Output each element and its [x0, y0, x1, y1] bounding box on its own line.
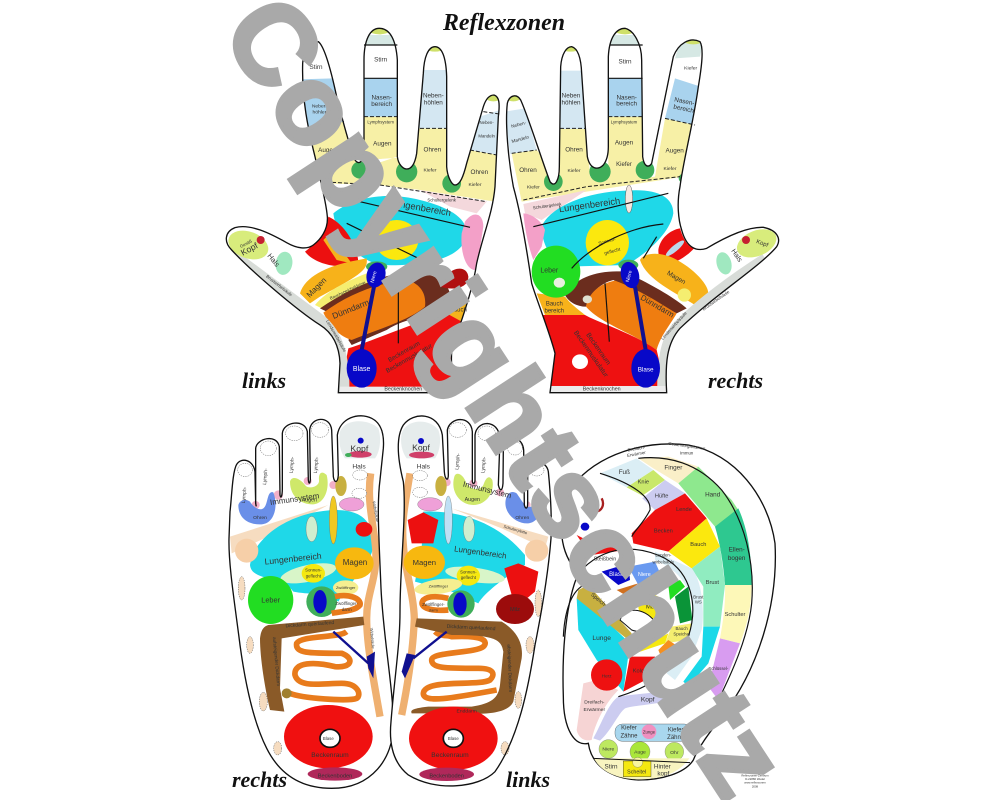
labels: geflecht	[461, 575, 477, 580]
labels: Brustwirbelsäule	[701, 289, 731, 312]
labels: Lenden-	[655, 553, 672, 558]
helix inner curves	[563, 458, 752, 700]
labels: höhlen	[313, 109, 328, 115]
shoulder band	[230, 505, 328, 553]
labels	[511, 59, 769, 393]
outline	[229, 416, 393, 788]
copyright note: 2008	[752, 784, 759, 788]
labels: Augen	[666, 148, 684, 155]
stomach	[640, 254, 708, 305]
lung area	[542, 190, 673, 267]
labels: Dreifach-	[627, 444, 646, 453]
thumb zones	[736, 229, 776, 258]
eyes U	[290, 473, 328, 504]
labels: Hüfte	[655, 494, 668, 500]
helix ring segments	[593, 457, 752, 741]
small intestine	[323, 280, 425, 340]
labels: Hals	[729, 248, 743, 264]
toe pink	[252, 477, 337, 509]
labels: Niere	[370, 270, 379, 284]
labels: Dünndarm	[433, 688, 460, 694]
labels: Bauch	[690, 542, 706, 548]
left hand zones	[224, 27, 500, 393]
labels: Magen	[646, 604, 664, 610]
labels: Blase	[609, 572, 625, 578]
labels: Leber	[540, 268, 559, 275]
thumb web red	[658, 228, 694, 264]
labels: Schultergelenk	[427, 198, 457, 203]
labels: Neben-	[480, 120, 494, 125]
labels: Beckenmuskulatur	[385, 343, 434, 375]
labels: Blase	[448, 736, 459, 741]
labels: Beckenraum	[431, 752, 469, 759]
colon	[565, 271, 687, 313]
ear silhouette	[562, 444, 775, 780]
labels: Erwärmer	[584, 707, 605, 713]
right foot silhouette	[229, 416, 393, 788]
black leader lines	[347, 45, 470, 343]
labels: Fuß	[619, 469, 630, 476]
ear lobe zones	[588, 724, 695, 782]
labels: Mandeln	[478, 133, 496, 138]
labels: Beckenboden	[429, 773, 464, 779]
labels: Stirn	[604, 764, 618, 771]
labels: Leber	[261, 595, 281, 604]
labels: Beckenraum	[387, 340, 421, 364]
label rechts hand: rechts	[708, 368, 763, 393]
labels: bogen	[728, 555, 746, 562]
inner zones	[577, 497, 692, 740]
labels: Milz	[510, 607, 520, 613]
labels: Augen	[302, 498, 317, 504]
labels: Blase	[353, 366, 371, 373]
labels: Kiefer	[527, 184, 540, 190]
labels: Schulterplatte	[503, 524, 529, 536]
labels: Nasen-	[616, 94, 637, 101]
labels: Hals	[265, 252, 282, 269]
labels: absteigender Dickdarm	[506, 644, 513, 692]
labels: Neben-	[423, 93, 444, 100]
labels: Scheitel	[627, 769, 646, 775]
labels: Blase	[638, 366, 654, 373]
labels: Neben	[562, 93, 581, 100]
labels: Magen	[666, 270, 687, 286]
spine band	[402, 473, 414, 715]
labels: bereich	[616, 100, 638, 107]
foot side labels: rechts	[232, 767, 287, 792]
labels: geflecht	[604, 247, 621, 256]
labels: Brust	[706, 580, 719, 586]
labels: Lymph-	[289, 456, 296, 473]
labels: Sonnen-	[305, 568, 322, 573]
labels: Beckenboden	[318, 773, 352, 779]
labels: Magen	[343, 558, 367, 567]
dashed circles	[413, 423, 544, 755]
labels: Magen	[305, 276, 328, 299]
labels: Kolon	[633, 668, 647, 674]
labels: höhlen	[561, 99, 581, 106]
head details	[345, 438, 372, 458]
colon	[411, 618, 522, 714]
labels: geflecht	[306, 573, 322, 578]
thumb zones	[228, 230, 268, 260]
lung area	[333, 196, 467, 265]
labels: Zähne	[621, 733, 638, 739]
labels: Lungenbereich	[264, 551, 322, 567]
colon	[320, 272, 450, 345]
labels: Mandeln	[511, 134, 530, 144]
label links foot: links	[506, 767, 550, 792]
pink zone	[461, 215, 483, 270]
labels: Brust	[693, 594, 704, 599]
dash lines	[512, 117, 695, 200]
spine band	[233, 255, 344, 393]
copyright note: Copyright	[749, 770, 761, 774]
labels: Augen	[615, 140, 634, 147]
labels: Beckenmuskulatur	[572, 330, 610, 379]
pelvis	[409, 707, 498, 770]
kidney and bladder	[347, 260, 388, 388]
left hand silhouette	[226, 28, 499, 393]
labels: Lunge	[592, 635, 611, 642]
labels: Wirbelsäule	[369, 628, 376, 650]
labels: Speiche	[589, 592, 609, 610]
labels: Hals	[352, 463, 366, 470]
labels: Finger	[664, 464, 682, 471]
labels: Hand	[705, 492, 721, 499]
pelvis	[543, 315, 659, 386]
left foot silhouette	[390, 416, 551, 786]
labels: Kopf	[641, 697, 655, 704]
copyright note: Reflexzonen-Zentrum	[741, 774, 769, 778]
labels: Ohren	[424, 147, 442, 154]
labels: Zwölffinger-	[335, 601, 358, 606]
labels: wirbelsäule	[653, 559, 675, 564]
outline	[226, 28, 499, 393]
labels: Herz	[602, 673, 612, 678]
labels: Dünndarm	[639, 293, 676, 320]
labels: Lymphsystem	[367, 119, 394, 124]
labels: höhlen	[424, 99, 443, 106]
ureter and bladder	[333, 632, 368, 663]
labels: Nasen-	[674, 96, 695, 107]
copyright note: www.reflexzonen	[744, 780, 766, 784]
labels	[412, 443, 529, 779]
labels: Immun	[680, 451, 694, 456]
labels: Becken	[654, 528, 673, 534]
labels: Kopf	[350, 444, 369, 454]
labels: Auge	[634, 749, 646, 755]
labels: Hinter	[654, 764, 671, 771]
copyright note	[741, 770, 769, 788]
labels: Zunge	[643, 729, 656, 734]
labels: Ohren	[471, 169, 489, 176]
labels: Kopf	[755, 239, 769, 249]
dashed circles	[238, 423, 367, 755]
labels: Hals	[417, 463, 431, 470]
labels: Schulter	[725, 612, 745, 618]
black leader lines	[533, 45, 668, 342]
labels: Lende	[676, 507, 692, 513]
finger dash lines	[307, 112, 499, 202]
labels	[584, 441, 746, 778]
labels: Dünndarm	[320, 688, 347, 694]
labels: Magen	[413, 558, 436, 567]
labels: WS	[695, 600, 702, 605]
diaphragm yellow circle	[375, 220, 418, 260]
lower helix	[593, 687, 685, 741]
labels: Steißbein	[594, 557, 616, 563]
heart	[408, 512, 438, 543]
labels: darm	[342, 607, 352, 612]
labels	[239, 57, 496, 393]
labels: Lymph-	[262, 468, 269, 485]
hand side labels: links	[242, 368, 286, 393]
labels: Wirbelsäule	[372, 501, 380, 523]
labels: Kiefer	[668, 728, 683, 734]
outline	[507, 28, 779, 393]
left foot zones	[401, 422, 548, 781]
labels: Ohren	[253, 515, 267, 521]
stomach	[300, 258, 367, 303]
right hand zones	[505, 27, 781, 393]
labels: Kiefer	[663, 166, 677, 172]
labels: Kiefer	[423, 168, 437, 174]
heart zone and bladder	[554, 260, 660, 388]
heart	[305, 217, 358, 266]
labels: Bauch	[676, 626, 688, 631]
labels: Knie	[638, 479, 649, 485]
labels: Brustwirbelsäule	[265, 274, 294, 298]
labels: Augen	[465, 497, 480, 503]
panel: left foot	[390, 416, 551, 786]
pink zone	[523, 213, 545, 260]
lung area	[415, 511, 525, 603]
right hand silhouette	[507, 28, 779, 393]
labels: Zähne	[667, 735, 685, 741]
labels: Ohren	[565, 147, 583, 154]
spine band	[367, 473, 380, 717]
labels: Sonnen-	[460, 569, 477, 574]
labels: Ellen-	[729, 547, 745, 554]
labels: Ohr	[670, 750, 679, 756]
labels: Beckenraum	[311, 752, 349, 759]
labels: Erwärmer	[627, 450, 647, 458]
labels: Speichel	[673, 631, 690, 636]
labels: Dickdarm querlaufend	[447, 624, 496, 632]
labels: Immunsystem	[269, 491, 320, 507]
labels: Bauch	[450, 308, 467, 314]
labels: Augen	[318, 147, 337, 154]
labels: Kopf	[239, 240, 260, 258]
lung area	[250, 510, 373, 602]
labels: Lungenbereich	[558, 196, 621, 214]
labels: Kiefer	[567, 168, 581, 174]
labels: Lymph-	[454, 453, 462, 470]
labels: bereich	[371, 101, 393, 108]
labels: Schlüssel-	[708, 666, 729, 671]
ears U	[238, 492, 276, 524]
labels: Gesäß	[239, 238, 253, 249]
labels: Dünndarm	[331, 297, 370, 321]
web points	[544, 161, 688, 191]
labels: kopf	[657, 771, 670, 778]
title: Reflexzonen	[442, 10, 565, 36]
labels: Stirn	[374, 57, 388, 64]
labels: Enddarm	[457, 708, 477, 714]
thymus oval	[625, 185, 633, 213]
ureter and bladder	[413, 632, 447, 658]
labels: Niere	[602, 747, 615, 753]
labels: Lymph-	[480, 456, 488, 473]
labels: Kiefer	[621, 725, 637, 731]
labels: aufsteigender Dickdarm	[272, 637, 281, 686]
copyright note: D-22880 Wedel	[745, 777, 765, 781]
labels: Beckenknochen	[384, 387, 422, 393]
labels: Beckenraum	[584, 332, 612, 367]
labels: Nasen-	[371, 94, 392, 101]
spine band	[662, 258, 765, 393]
labels: Augen	[373, 140, 392, 147]
small intestine	[290, 596, 360, 700]
labels: Zwölffinger	[336, 585, 356, 590]
labels: Bauch	[546, 302, 563, 308]
labels	[241, 444, 380, 779]
labels: Stirn	[618, 59, 632, 66]
head details	[409, 438, 434, 458]
labels: Dreifach-	[584, 699, 605, 705]
labels: Kiefer	[616, 162, 632, 168]
head zone	[339, 421, 380, 458]
colon	[260, 617, 364, 712]
labels: bereich	[545, 309, 564, 315]
panel: ear	[562, 441, 775, 788]
outline	[390, 416, 551, 786]
labels: Lendenwirbelsäule	[660, 310, 688, 341]
labels: Sonnen-	[598, 236, 617, 246]
labels: Dickdarm querlaufend	[285, 620, 335, 629]
labels: Zwölffinger	[429, 584, 449, 589]
labels: Zwölffinger-	[422, 602, 445, 607]
labels: Lymphsystem	[611, 119, 638, 124]
labels: Lymph-	[313, 456, 320, 473]
labels: Stirn	[309, 64, 323, 71]
labels: darm	[429, 608, 439, 613]
labels: Niere	[638, 572, 651, 578]
panel: right foot	[229, 416, 393, 788]
labels: Kopf	[412, 443, 430, 453]
labels: Blase	[323, 736, 334, 741]
pelvis	[346, 314, 461, 387]
labels: bereich	[673, 104, 695, 115]
labels: Neben-	[312, 103, 329, 109]
labels: Dünndarm	[448, 642, 472, 648]
right foot zones	[230, 421, 380, 781]
small intestine	[422, 597, 497, 699]
labels: Lymph-	[241, 486, 248, 503]
labels: Gesamtorganismus	[668, 441, 706, 451]
bowel zone	[537, 293, 585, 315]
labels: Lendenwirbelsäule	[325, 319, 348, 353]
diaphragm yellow circle	[586, 220, 629, 265]
labels: Lungenbereich	[454, 544, 507, 561]
green liver	[532, 246, 580, 298]
pelvis	[284, 705, 373, 768]
labels: Bauchspeicheldrüse	[329, 280, 367, 301]
labels: Kiefer	[684, 65, 698, 71]
labels: Neben-	[511, 120, 527, 129]
labels: Ohren	[519, 167, 537, 174]
labels: Ohren	[515, 515, 529, 521]
panel: left hand	[224, 27, 500, 393]
small intestine	[586, 281, 677, 350]
labels: Kiefer	[468, 182, 482, 188]
labels: Dünndarm	[305, 642, 328, 648]
labels: Beckenknochen	[583, 387, 621, 393]
labels: Schultergelenk	[533, 201, 562, 210]
labels: Immunsystem	[462, 480, 513, 500]
panel: right hand	[505, 27, 781, 393]
labels: Lungenbereich	[389, 197, 452, 218]
web points	[351, 161, 461, 193]
labels: Niere	[625, 270, 634, 283]
